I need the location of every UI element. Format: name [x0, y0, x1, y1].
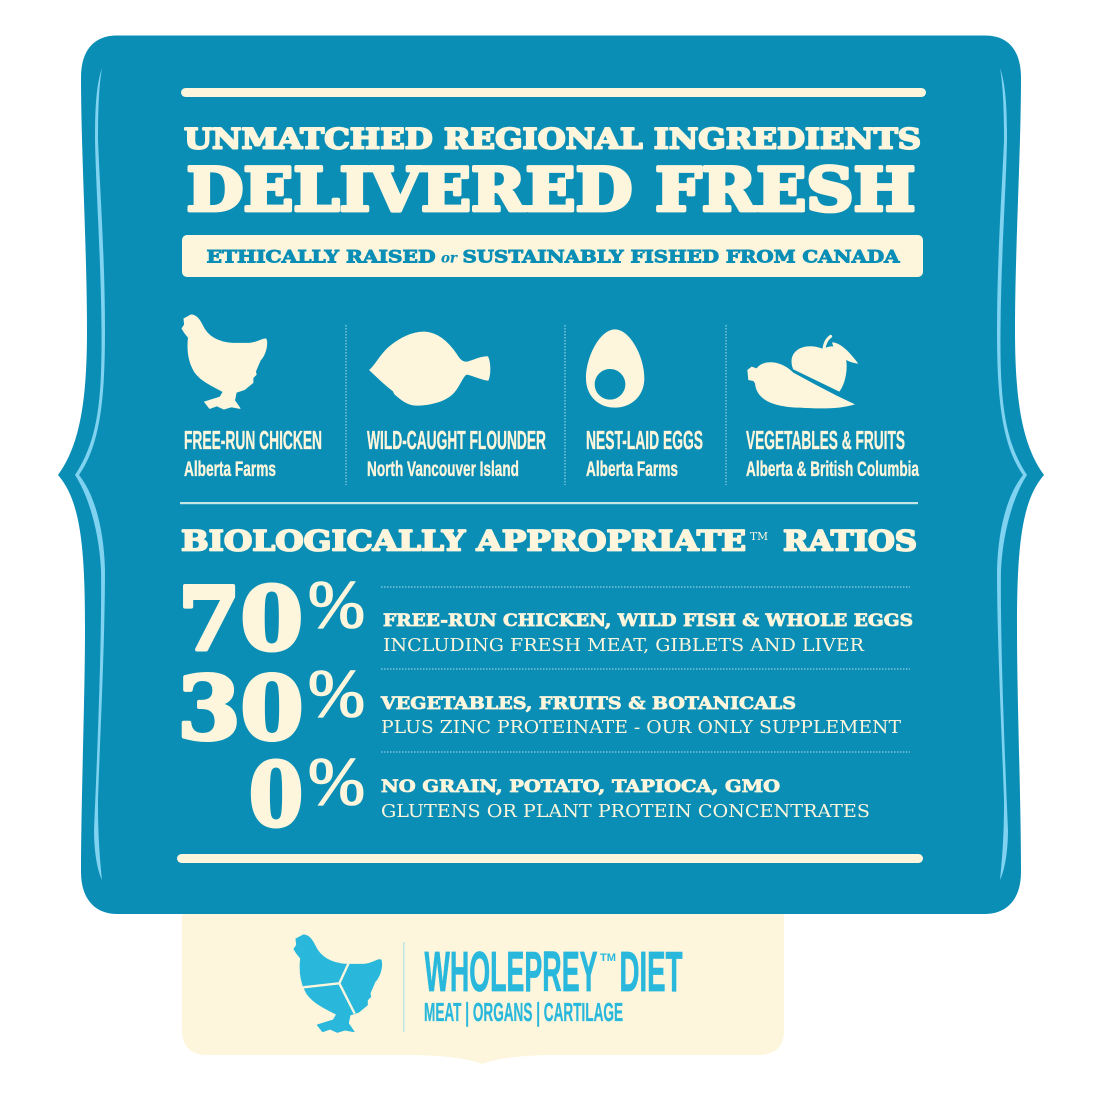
subtitle band: SUSTAINABLY FISHED FROM CANADA: [462, 248, 900, 267]
icon: flounder: [370, 332, 490, 405]
ratio: 0 percent: [249, 743, 870, 846]
ratio: 70 percent: 70: [178, 568, 303, 670]
ratio: 30 percent: 30: [178, 657, 304, 760]
ratio: 0 percent: NO GRAIN, POTATO, TAPIOCA, GMO: [381, 777, 780, 797]
subtitle band: ETHICALLY RAISED: [206, 248, 436, 267]
bottom rule: [177, 854, 923, 863]
left edge highlight: [75, 68, 105, 880]
right edge highlight: [997, 68, 1027, 880]
label: free-run chicken: Alberta Farms: [184, 458, 276, 481]
ratio: 30 percent: %: [308, 655, 365, 731]
label: nest-laid eggs: [586, 425, 703, 481]
label: wild-caught flounder: WILD-CAUGHT FLOUNDER: [367, 425, 546, 455]
label: free-run chicken: [184, 425, 322, 481]
icon: chicken: [182, 315, 267, 409]
ratio: 0 percent: %: [308, 743, 365, 819]
label: vegetables and fruits: [746, 425, 919, 481]
heading: ratios: [181, 524, 917, 558]
panel: WholePrey diet tag: [182, 905, 784, 1064]
ratio: 0 percent: 0: [249, 744, 303, 846]
ratio: 70 percent: FREE-RUN CHICKEN, WILD FISH & WHOLE EGGS: [383, 611, 913, 631]
rule under ingredients: [180, 502, 918, 504]
panel: WholePrey diet tag: DIET: [620, 940, 683, 1004]
subtitle band: [182, 235, 923, 277]
subtitle band: or: [441, 251, 459, 267]
wholeprey title: WHOLEPREY: [424, 940, 598, 1004]
divider line: [403, 942, 404, 1032]
row dividers: [381, 587, 910, 752]
icon: apple and carrot: [747, 336, 858, 408]
title: UNMATCHED REGIONAL INGREDIENTS: [184, 122, 921, 155]
label: wild-caught flounder: North Vancouver Island: [367, 458, 519, 481]
ratio: 30 percent: PLUS ZINC PROTEINATE - OUR ONLY SUPPLEMENT: [381, 717, 901, 738]
panel: main blue label: [58, 36, 1044, 914]
ratio: 70 percent: %: [308, 566, 365, 642]
ratio: 30 percent: [178, 655, 901, 760]
column dividers: [346, 325, 726, 485]
icon: egg: [586, 329, 644, 408]
label: vegetables and fruits: Alberta & British Columbia: [746, 458, 919, 481]
ratio: 70 percent: INCLUDING FRESH MEAT, GIBLETS AND LIVER: [383, 635, 864, 656]
wholeprey subtitle: MEAT | ORGANS | CARTILAGE: [424, 997, 623, 1027]
ratio: 70 percent: [178, 566, 913, 670]
label: vegetables and fruits: VEGETABLES & FRUITS: [746, 425, 905, 455]
top rule: [181, 88, 926, 97]
heading: ratios: RATIOS: [783, 524, 917, 558]
label: free-run chicken: FREE-RUN CHICKEN: [184, 425, 322, 455]
ratio: 30 percent: VEGETABLES, FRUITS & BOTANICALS: [380, 694, 796, 714]
title: [184, 122, 921, 226]
heading: ratios: BIOLOGICALLY APPROPRIATE: [181, 524, 746, 558]
heading: ratios: TM: [750, 530, 768, 543]
label: nest-laid eggs: NEST-LAID EGGS: [586, 425, 703, 455]
label: nest-laid eggs: Alberta Farms: [586, 458, 678, 481]
ratio: 0 percent: GLUTENS OR PLANT PROTEIN CONCENTRATES: [381, 801, 870, 822]
label: wild-caught flounder: [367, 425, 546, 481]
icon: segmented chicken: [294, 935, 382, 1032]
title: DELIVERED FRESH: [186, 156, 916, 226]
wholeprey title: TM: [600, 952, 616, 964]
